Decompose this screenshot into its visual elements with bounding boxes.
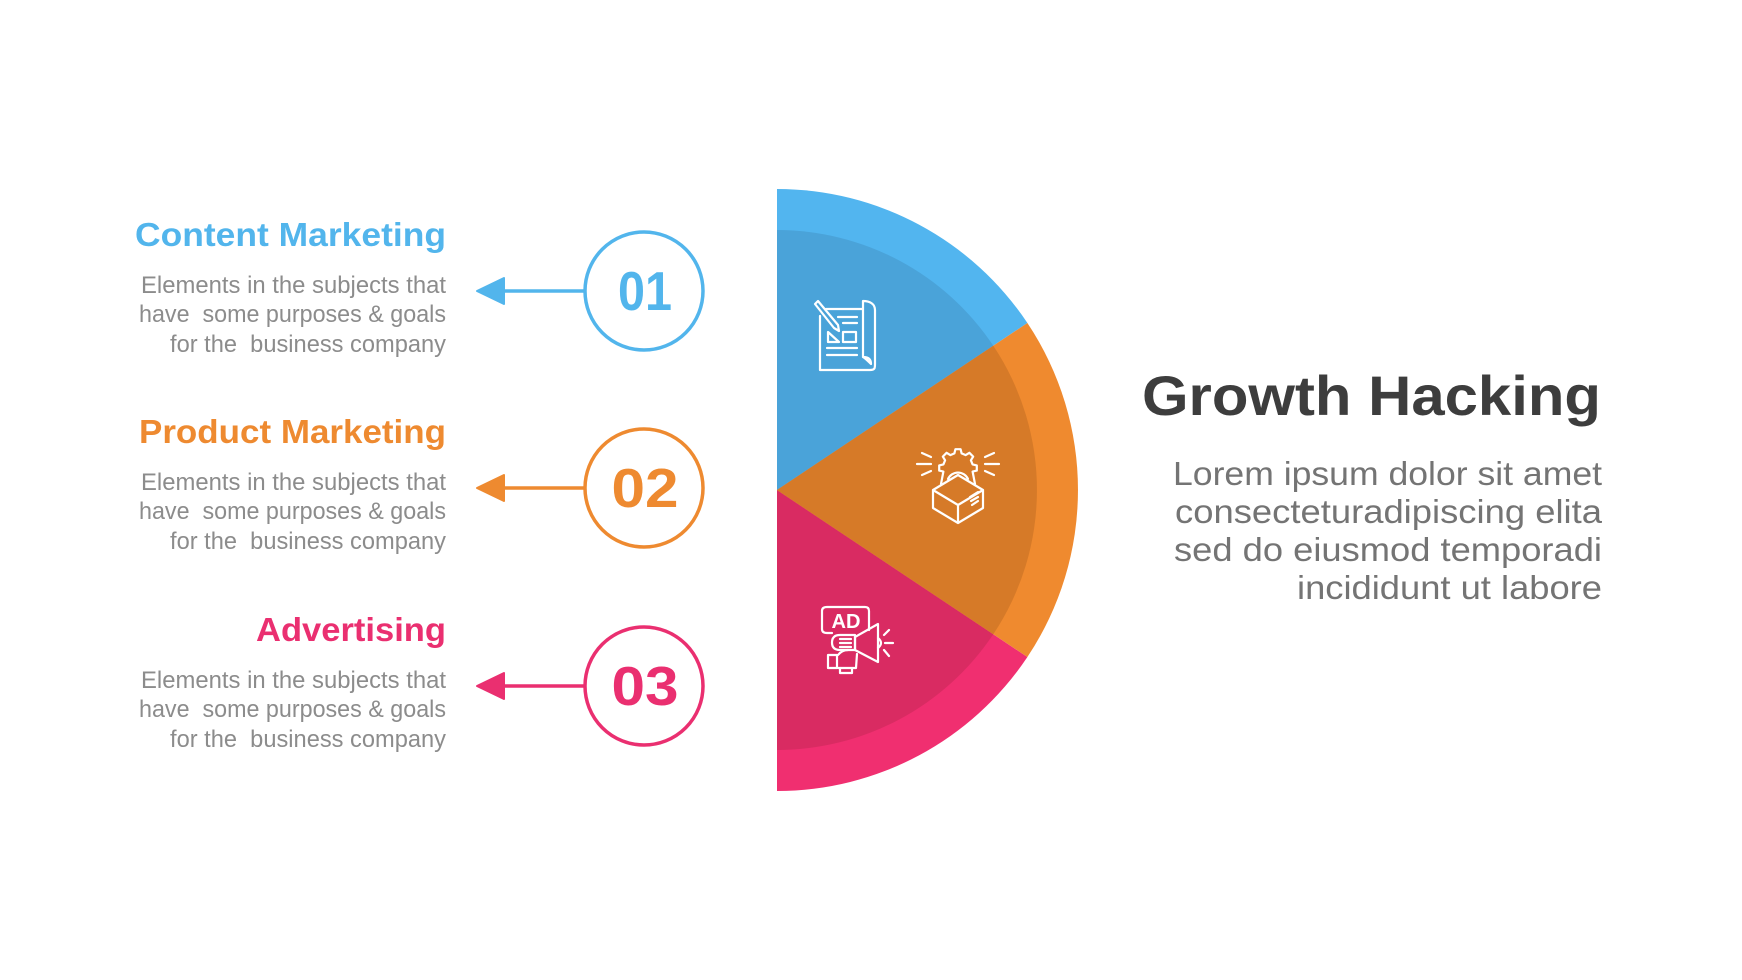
icon: advertising megaphone: AD	[832, 611, 860, 633]
arrow: item 2	[477, 475, 586, 501]
panel: item 2 product marketing	[139, 413, 703, 555]
number badge 03	[585, 627, 703, 745]
text block: intro paragraph: incididunt ut labore	[1297, 569, 1602, 606]
text block: item 1 description	[139, 272, 447, 358]
number badge 02	[585, 429, 703, 547]
number badge 01	[585, 232, 703, 350]
segment: pink	[777, 490, 1027, 791]
text block: intro paragraph: consecteturadipiscing elita	[1175, 493, 1603, 530]
text block: item 3 description: Elements in the subjects that	[141, 667, 446, 694]
heading: content marketing: Content Marketing	[135, 216, 446, 253]
number badge 02: 02	[612, 457, 678, 519]
arrow: item 1	[477, 278, 586, 304]
panel: item 3 advertising	[139, 611, 703, 753]
text block: intro paragraph	[1173, 455, 1603, 606]
segment: blue	[777, 189, 1027, 490]
number badge 03: 03	[612, 655, 678, 717]
text block: item 1 description: for the business company	[170, 331, 447, 358]
icon: product box with gear	[917, 449, 999, 523]
icon: advertising megaphone	[822, 607, 893, 673]
panel: item 1 content marketing	[135, 216, 703, 358]
text block: item 1 description: have some purposes & goals	[139, 301, 446, 328]
number badge 01: 01	[618, 260, 672, 322]
heading: product marketing: Product Marketing	[139, 413, 446, 450]
title: Growth Hacking	[1142, 364, 1601, 427]
text block: item 2 description	[139, 469, 447, 555]
text block: item 2 description: have some purposes & goals	[139, 498, 446, 525]
chart: semicircle pie	[777, 189, 1078, 791]
arrow: item 3	[477, 673, 586, 699]
text block: item 3 description	[139, 667, 447, 753]
heading: advertising: Advertising	[256, 611, 446, 648]
text block: item 2 description: Elements in the subjects that	[141, 469, 446, 496]
icon: blueprint document	[815, 301, 875, 370]
segment: orange	[777, 323, 1078, 657]
text block: item 3 description: have some purposes & goals	[139, 696, 446, 723]
text block: item 2 description: for the business company	[170, 528, 447, 555]
text block: intro paragraph: Lorem ipsum dolor sit amet	[1173, 455, 1602, 492]
text block: intro paragraph: sed do eiusmod temporadi	[1174, 531, 1602, 568]
text block: item 3 description: for the business company	[170, 726, 447, 753]
text block: item 1 description: Elements in the subjects that	[141, 272, 446, 299]
